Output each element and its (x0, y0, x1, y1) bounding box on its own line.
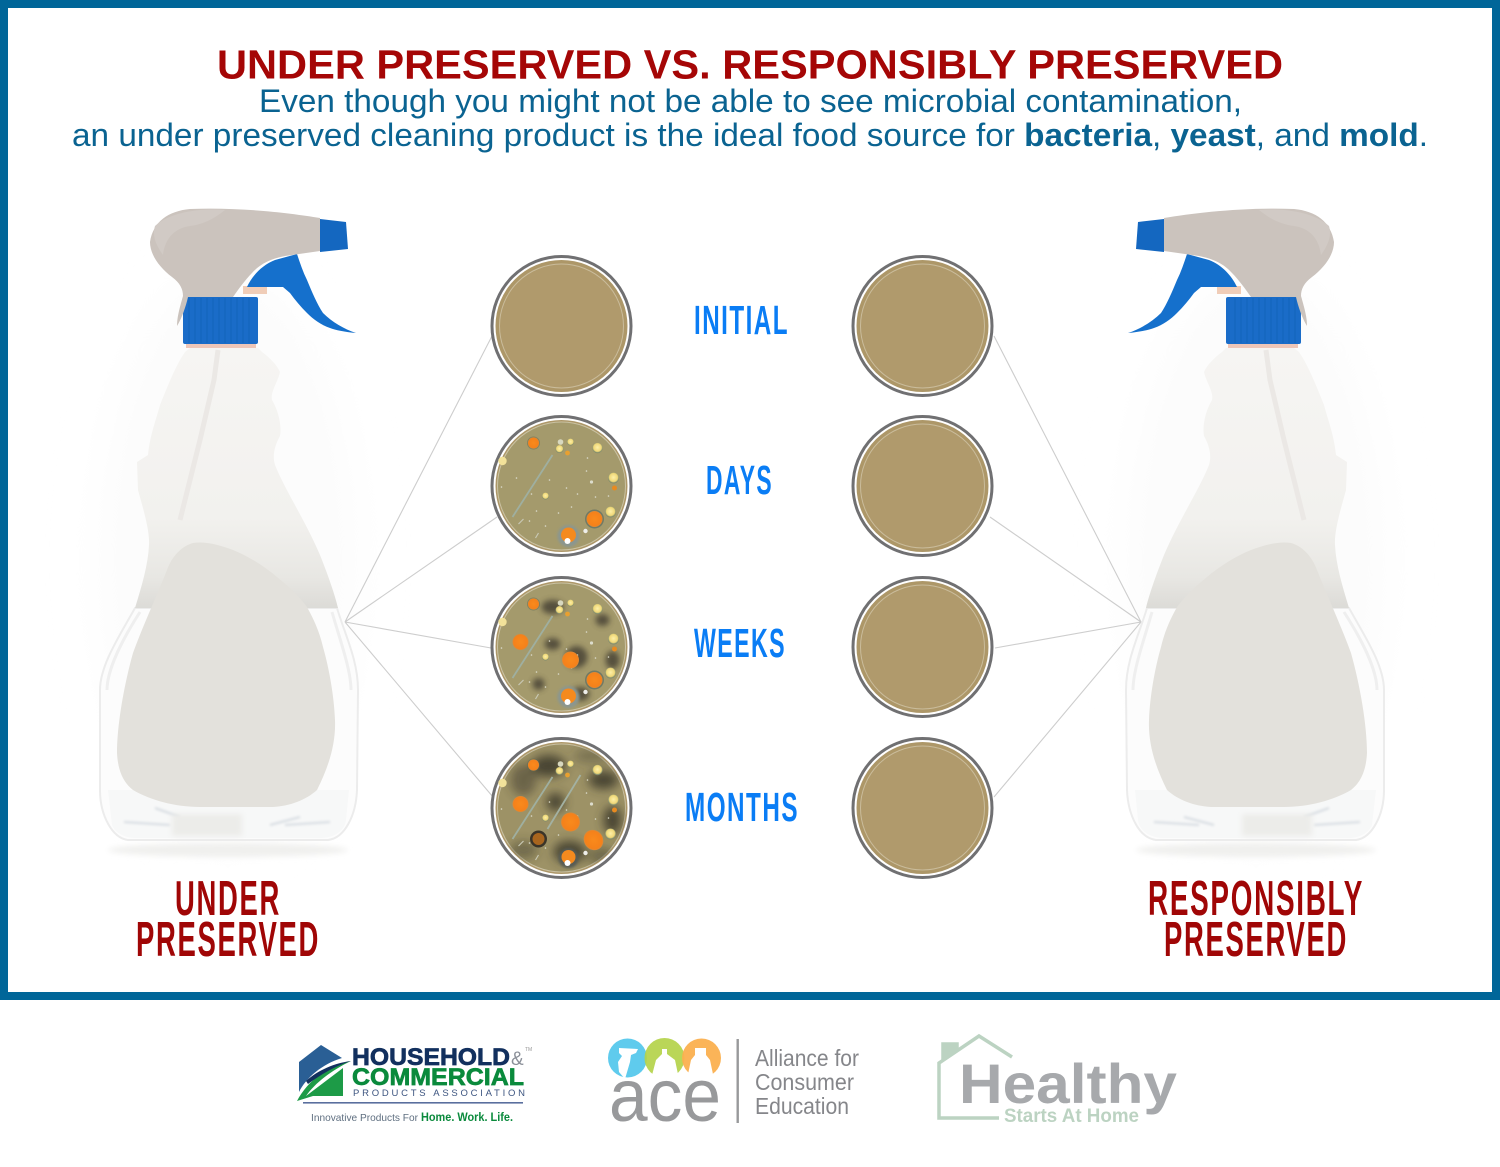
heading: under preserved (136, 872, 320, 967)
logo: household and commercial products association: PRODUCTS ASSOCIATION (353, 1088, 525, 1099)
petri dish: responsibly preserved days (853, 416, 992, 556)
logo: alliance for consumer education: Consumer (755, 1069, 854, 1095)
logo: healthy starts at home: Healthy (959, 1052, 1177, 1115)
icon: product circles (608, 1038, 721, 1079)
label: days: DAYS (706, 457, 773, 503)
title: UNDER PRESERVED VS. RESPONSIBLY PRESERVED (217, 42, 1283, 88)
logo: healthy starts at home: Starts At Home (1004, 1106, 1139, 1127)
heading: responsibly preserved (1148, 872, 1364, 967)
petri dish: responsibly preserved months (853, 738, 992, 878)
petri dish: under preserved days (492, 416, 631, 556)
bottle: responsibly preserved (1126, 209, 1386, 857)
petri dish: under preserved weeks (492, 578, 631, 716)
heading: under preserved: PRESERVED (136, 913, 320, 967)
logo: household and commercial products association (297, 1044, 532, 1124)
subtitle (72, 83, 1428, 153)
petri dish: under preserved months (492, 738, 631, 878)
petri dish: responsibly preserved weeks (853, 578, 992, 716)
label: months: MONTHS (685, 784, 799, 830)
icon: house (297, 1045, 351, 1101)
subtitle: an under preserved cleaning product is the ideal food source for bacteria, yeast, and mold. (72, 117, 1428, 153)
logo: household and commercial products association: & (511, 1049, 524, 1070)
logo: household and commercial products association: COMMERCIAL (352, 1064, 524, 1091)
logo: alliance for consumer education (608, 1038, 859, 1137)
logo: alliance for consumer education: ace (609, 1054, 721, 1137)
logo: household and commercial products association: Innovative Products For (311, 1112, 418, 1124)
connector lines: left (345, 336, 497, 797)
petri dish: responsibly preserved initial (853, 256, 992, 396)
label: weeks: WEEKS (694, 620, 786, 666)
logo: alliance for consumer education: Education (755, 1093, 849, 1119)
logo: household and commercial products association: TM (525, 1047, 532, 1053)
bottle: under preserved (98, 209, 358, 857)
logo: household and commercial products association: HOUSEHOLD (352, 1044, 510, 1071)
heading: responsibly preserved: PRESERVED (1164, 913, 1348, 967)
heading: under preserved: UNDER (175, 872, 281, 926)
logo: household and commercial products association: Home. Work. Life. (421, 1110, 513, 1124)
logo: healthy starts at home (939, 1036, 1177, 1127)
subtitle: Even though you might not be able to see microbial contamination, (259, 83, 1242, 119)
label: initial: INITIAL (694, 297, 789, 343)
connector lines: right (990, 336, 1141, 797)
logo: alliance for consumer education: Alliance for (755, 1045, 859, 1071)
petri dish: under preserved initial (492, 256, 631, 396)
icon: house outline (939, 1036, 1012, 1118)
